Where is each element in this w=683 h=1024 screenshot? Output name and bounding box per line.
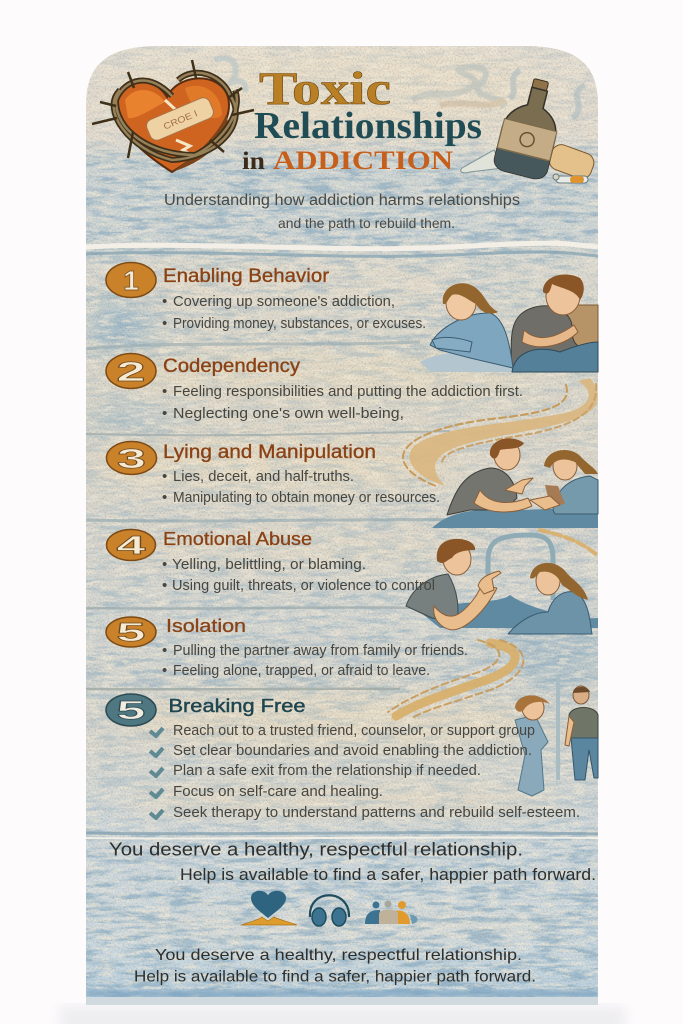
closing message: Help is available to find a safer, happier path forward. [180, 866, 596, 884]
section 4: emotional abuse [106, 529, 598, 634]
illustration: woman walking away from man [515, 675, 598, 796]
heading: Lying and Manipulation [163, 442, 376, 463]
closing message repeated [134, 947, 536, 986]
road: winding path lower [388, 530, 598, 718]
closing message: You deserve a healthy, respectful relationship. [109, 838, 523, 860]
illustration: man pointing at woman [406, 535, 598, 634]
bullets: • [162, 489, 167, 506]
bandage [144, 96, 216, 142]
section 3: lying and manipulation [106, 438, 598, 528]
bullets: • [162, 662, 167, 679]
thorn wreath [92, 60, 254, 160]
bullets: Neglecting one's own well-being, [173, 405, 404, 422]
section 1: enabling behavior [106, 262, 598, 372]
checklist text [173, 722, 580, 821]
page shadow under panel [60, 1006, 625, 1024]
number badge 5: 5 [116, 617, 146, 647]
subtitle [164, 192, 520, 231]
heading: Isolation [166, 616, 246, 636]
panel: textured background [80, 46, 610, 1006]
bullets: • [162, 405, 167, 422]
number badge 3 [106, 442, 156, 474]
bullets: • [162, 577, 167, 594]
icon: smoke swirls [215, 58, 585, 118]
title line: ADDICTION: ADDICTION [273, 146, 453, 175]
title line: in: in [242, 148, 265, 175]
number badge [106, 694, 156, 726]
checklist [150, 722, 580, 821]
title line: Relationships: Relationships [254, 105, 482, 147]
bullets: Providing money, substances, or excuses. [173, 315, 426, 332]
bullets: • [162, 468, 167, 485]
bullets: Covering up someone's addiction, [173, 293, 395, 310]
bullets: Yelling, belittling, or blaming. [172, 556, 366, 573]
heading: Breaking Free [168, 695, 306, 716]
heading: Codependency [163, 356, 301, 377]
bullets: • [162, 383, 167, 400]
illustration: couple with phone [432, 438, 598, 528]
number badge 5 [106, 617, 156, 647]
bullets [162, 383, 523, 422]
closing message [109, 838, 596, 884]
checklist text: Plan a safe exit from the relationship if needed. [173, 762, 481, 779]
title line: Toxic: Toxic [259, 63, 391, 115]
support icons row [241, 891, 418, 926]
number badge 4: 4 [116, 530, 147, 560]
number badge 4 [106, 530, 156, 560]
subtitle: and the path to rebuild them. [278, 215, 455, 231]
number badge 3: 3 [117, 443, 146, 474]
icon: bottle, tube and pills [461, 74, 597, 183]
bullets [162, 468, 440, 506]
bullets: • [162, 642, 167, 659]
number badge 2: 2 [116, 356, 146, 387]
bullets: • [162, 556, 167, 573]
subtitle: Understanding how addiction harms relationships [164, 192, 520, 209]
icon: broken heart in thorns [92, 60, 254, 172]
section divider waves [86, 243, 598, 839]
heading: Emotional Abuse [163, 529, 312, 549]
bullets: Using guilt, threats, or violence to control [172, 577, 435, 594]
bullets: Feeling responsibilities and putting the addiction first. [173, 383, 523, 400]
checklist text: Set clear boundaries and avoid enabling the addiction. [173, 742, 532, 759]
bullets: Pulling the partner away from family or friends. [173, 642, 468, 659]
bullets: • [162, 293, 167, 310]
section 5: isolation [106, 616, 468, 679]
bandage: CROE I [162, 108, 199, 132]
check icons [150, 728, 163, 818]
bullets [162, 293, 426, 332]
title [242, 63, 482, 175]
number badge: 5 [116, 695, 146, 725]
bullets: Feeling alone, trapped, or afraid to leave. [173, 662, 430, 679]
bullets: • [162, 315, 167, 332]
bullets [162, 556, 435, 594]
checklist text: Reach out to a trusted friend, counselor, or support group [173, 722, 535, 739]
checklist text: Seek therapy to understand patterns and rebuild self-esteem. [173, 804, 580, 821]
illustration: couple sitting apart [420, 274, 598, 372]
closing message repeated: You deserve a healthy, respectful relationship. [155, 947, 522, 964]
icon: headphones [310, 895, 349, 926]
number badge 2 [106, 354, 156, 388]
checklist text: Focus on self-care and healing. [173, 783, 383, 800]
road: winding path upper [403, 378, 598, 486]
heading: Enabling Behavior [163, 266, 330, 287]
number badge 1 [106, 262, 156, 298]
bullets: Manipulating to obtain money or resources. [173, 489, 440, 506]
number badge 1: 1 [123, 265, 139, 296]
bullets [162, 642, 468, 679]
bullets: Lies, deceit, and half-truths. [173, 468, 354, 485]
section 2: codependency [106, 354, 523, 422]
icon: heart in hands [241, 891, 297, 925]
section 6: breaking free [106, 675, 598, 821]
closing message repeated: Help is available to find a safer, happier path forward. [134, 968, 536, 986]
icon: support group [365, 900, 418, 924]
infographic canvas [61, 46, 624, 1024]
